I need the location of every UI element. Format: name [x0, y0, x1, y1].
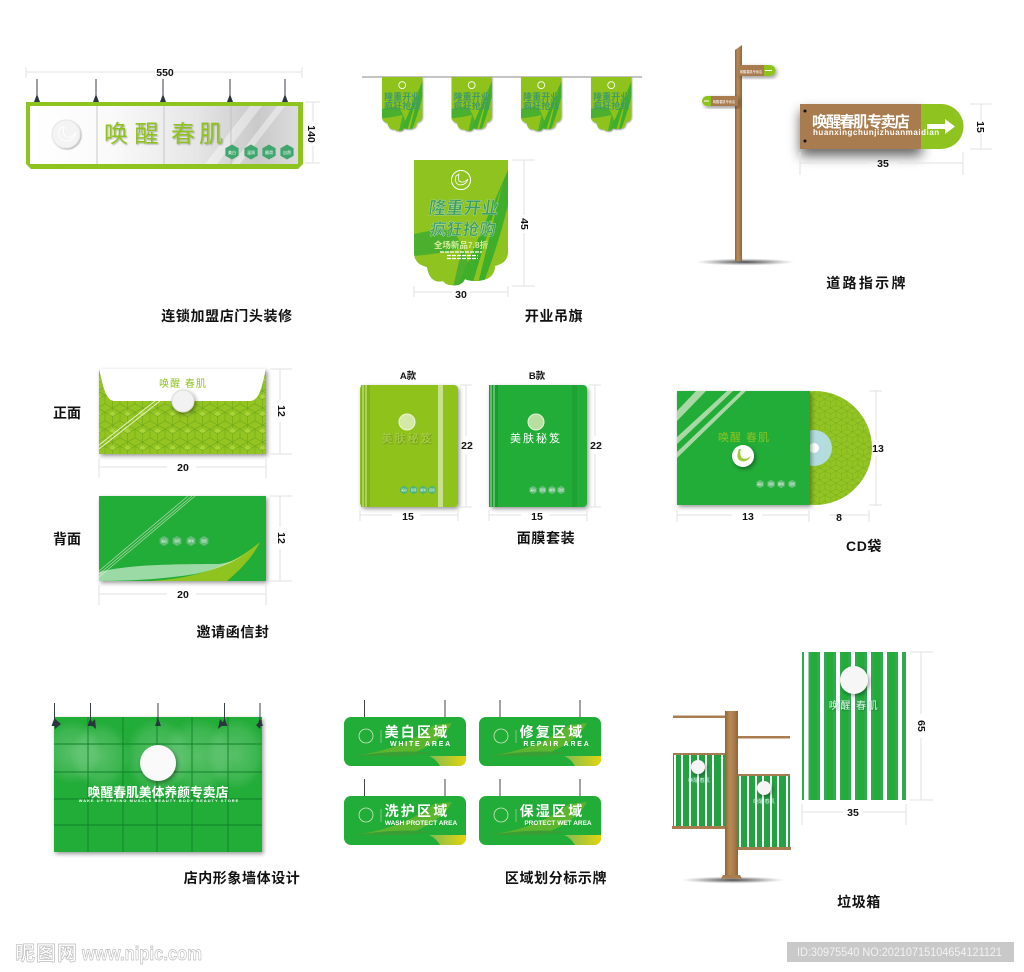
sign: whitening	[344, 717, 466, 766]
small pointer left: 唤醒春肌专卖店	[713, 99, 735, 104]
ground shadow	[681, 876, 785, 884]
panel: road sign	[695, 45, 992, 291]
sign: repair: REPAIR AREA	[523, 741, 591, 748]
caption: 开业吊旗	[525, 308, 583, 324]
mask box A: 嫩滑	[420, 488, 426, 492]
watermark logo	[15, 943, 202, 965]
panel: feature wall	[42, 703, 300, 886]
brand name	[104, 121, 227, 148]
sign: wash: 洗护区域	[385, 803, 449, 819]
mask box A: 温润	[411, 488, 416, 492]
sign: whitening: 美白区域	[385, 724, 449, 740]
small pointer right	[739, 65, 776, 76]
envelope back: 自然	[201, 539, 207, 543]
panel: hanging flags	[362, 77, 642, 324]
large flag: 疯狂抢购	[428, 219, 497, 239]
sign dimensions: 15	[974, 121, 986, 133]
mask box B: 嫩滑	[549, 488, 555, 492]
dimension: width 550: 140	[305, 125, 317, 143]
label front: 正面	[53, 405, 81, 421]
caption: 连锁加盟店门头装修	[161, 308, 293, 324]
mask dimensions: 22	[590, 440, 602, 452]
bin panel detail	[802, 652, 906, 800]
large sign detail	[800, 104, 964, 149]
panel: zone signs	[344, 700, 607, 886]
label back: 背面	[53, 531, 81, 547]
mask box A	[360, 385, 458, 507]
sign: repair: 修复区域	[520, 724, 584, 740]
bin right: 唤醒 春肌	[753, 798, 775, 805]
image ID badge	[787, 942, 1014, 962]
small flag 4	[591, 77, 631, 134]
envelope dimensions: 20	[177, 589, 189, 601]
CD dimensions: 8	[836, 512, 842, 524]
sign: whitening: WHITE AREA	[390, 741, 452, 748]
bin dimensions: 35	[847, 807, 859, 819]
bin dimensions: 65	[915, 720, 927, 732]
small flag 1: 疯狂抢购	[384, 100, 420, 111]
sleeve	[677, 391, 810, 505]
sleeve: 嫩滑	[778, 482, 784, 486]
mask box B: 温润	[540, 488, 545, 492]
mask box A: 美白	[401, 488, 407, 492]
brand name: 唤醒	[104, 121, 165, 148]
envelope back: 美白	[161, 539, 167, 543]
sign: wash: WASH PROTECT AREA	[385, 820, 457, 827]
small flag 3: 隆重开业	[523, 91, 559, 102]
bin right	[738, 774, 791, 850]
caption: 区域划分标示牌	[505, 870, 607, 886]
small pointer right: 唤醒春肌专卖店	[740, 69, 762, 74]
hexagon badges: 温润	[247, 149, 255, 155]
panel: storefront sign	[26, 67, 320, 324]
large sign detail: 唤醒春肌专卖店	[812, 113, 909, 131]
panel: mask set	[360, 370, 602, 546]
mask dimensions	[360, 385, 602, 523]
caption: 道路指示牌	[826, 275, 908, 291]
storefront frame	[26, 102, 303, 169]
image ID badge: ID:30975540 NO:20210715104654121121	[797, 947, 1002, 959]
bin dimensions	[802, 652, 933, 825]
large flag	[414, 160, 508, 292]
panel: CD sleeve	[677, 391, 884, 554]
sleeve: 唤醒 春肌	[718, 430, 770, 444]
small flag 2	[451, 77, 492, 134]
bin left	[672, 753, 725, 829]
large flag: 隆重开业	[427, 198, 500, 218]
CD dimensions: 13	[872, 443, 884, 455]
mask box A: 美肤秘笈	[382, 431, 434, 445]
sleeve: 美白	[757, 482, 763, 486]
mask box B: 美肤秘笈	[510, 431, 562, 445]
envelope back: 嫩滑	[188, 539, 194, 543]
small flag 1: 隆重开业	[384, 91, 420, 102]
small flag 2: 疯狂抢购	[454, 100, 490, 111]
watermark logo: www.nipic.com	[81, 944, 202, 965]
CD dimensions: 13	[742, 511, 754, 523]
small flag 4: 疯狂抢购	[593, 100, 629, 111]
logo watermark	[52, 120, 80, 148]
disc	[810, 391, 872, 505]
sign: moisturize: PROTECT WET AREA	[524, 820, 592, 827]
hexagon badges: 嫩滑	[265, 149, 273, 155]
envelope back	[99, 496, 266, 581]
small flag 2: 隆重开业	[454, 91, 490, 102]
sleeve: 自然	[789, 482, 795, 486]
mask dimensions: 22	[461, 440, 473, 452]
sign: repair	[479, 717, 601, 766]
label B: B款	[529, 370, 546, 382]
panel: trash bin	[672, 652, 933, 910]
mask dimensions: 15	[531, 511, 543, 523]
small flag 1	[382, 77, 422, 134]
mask box B: 自然	[558, 488, 564, 492]
dimension: width 550	[26, 67, 320, 163]
flag dimensions	[414, 160, 535, 301]
hexagon badges: 美白	[228, 149, 236, 155]
bin left: 唤醒 春肌	[688, 777, 710, 784]
brand name: 春肌	[171, 121, 227, 148]
wooden post	[735, 45, 742, 261]
caption: CD袋	[846, 538, 882, 554]
envelope back: 温润	[174, 539, 180, 543]
small flag 4: 隆重开业	[593, 91, 629, 102]
label A: A款	[400, 370, 417, 382]
envelope dimensions: 12	[275, 405, 287, 417]
sign dimensions: 35	[877, 158, 889, 170]
small flag 3	[521, 77, 561, 134]
watermark logo: 昵图网	[15, 943, 78, 965]
sign: moisturize	[479, 796, 601, 845]
hexagon badges	[225, 144, 294, 160]
panel: invitation envelope	[53, 369, 292, 640]
green wall	[54, 717, 262, 852]
spotlight glow	[42, 718, 266, 794]
spotlights	[52, 703, 263, 729]
flag dimensions: 45	[518, 218, 530, 230]
large flag: 全场新品7.8折	[434, 240, 489, 250]
caption: 邀请函信封	[196, 624, 270, 640]
envelope dimensions: 12	[275, 532, 287, 544]
ground shadow	[695, 258, 795, 266]
wall title: WAKE UP SPRING MUSCLE BEAUTY BODY BEAUTY STORE	[79, 798, 239, 803]
logo disc	[140, 745, 176, 781]
bin panel detail: 唤醒 春肌	[829, 699, 879, 712]
sign dimensions	[800, 104, 992, 175]
envelope dimensions	[99, 369, 292, 605]
small pointer left	[702, 96, 738, 106]
wooden post and arms	[673, 711, 790, 878]
caption: 垃圾箱	[837, 894, 881, 910]
large sign detail: huanxingchunjizhuanmaidian	[813, 128, 940, 137]
envelope front: 唤醒 春肌	[159, 377, 207, 390]
sign: moisturize: 保湿区域	[520, 803, 584, 819]
envelope dimensions: 20	[177, 462, 189, 474]
dimension: width 550: 550	[156, 67, 174, 79]
wall title: 唤醒春肌美体养颜专卖店	[88, 785, 229, 800]
wall grid	[54, 717, 262, 852]
mask box B: 美白	[530, 488, 536, 492]
hexagon badges: 自然	[283, 149, 291, 155]
sign: wash	[344, 796, 466, 845]
flag dimensions: 30	[455, 289, 467, 301]
mask dimensions: 15	[402, 511, 414, 523]
hanging rods	[34, 79, 288, 102]
hanger wires	[364, 700, 580, 796]
caption: 面膜套装	[517, 530, 575, 546]
rope	[362, 76, 642, 78]
mask box A: 自然	[429, 488, 435, 492]
sleeve: 温润	[768, 482, 774, 486]
CD dimensions	[677, 391, 884, 524]
small flag 3: 疯狂抢购	[523, 100, 559, 111]
mask box B	[489, 385, 587, 507]
caption: 店内形象墙体设计	[184, 870, 300, 886]
envelope front	[99, 369, 266, 454]
